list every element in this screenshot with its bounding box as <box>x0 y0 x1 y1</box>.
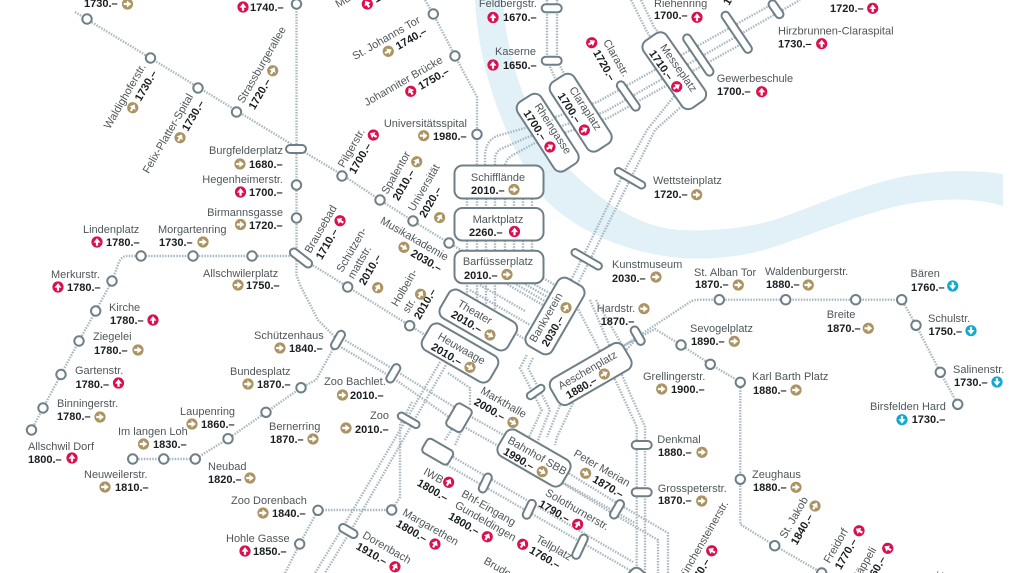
interchange: Bankverein: Bankverein <box>528 291 566 345</box>
label: Kunstmuseum: 2030.– <box>612 273 646 285</box>
label: Zeughaus: Zeughaus <box>752 469 801 481</box>
label: Waldenburgerstr.: Waldenburgerstr. <box>765 266 848 278</box>
label: Hohle Gasse <box>226 533 290 558</box>
label: Zoo Dorenbach: 1840.– <box>272 508 306 520</box>
label: Tellplatz <box>514 526 574 573</box>
label: Margarethen: Margarethen <box>400 507 460 548</box>
label: Freidorf: 1770.– <box>833 537 860 572</box>
label: Hirzbrunnen-Claraspital: 1730.– <box>778 39 812 51</box>
label: Denkmal: 1880.– <box>658 447 692 459</box>
label: Laupenring: 1860.– <box>201 419 235 431</box>
label: Sevogelplatz: 1890.– <box>691 336 725 348</box>
label: Johanniter Brücke: 1750.– <box>416 65 452 93</box>
label: Denkmal <box>657 434 708 459</box>
label: Zoo Bachlet. <box>324 376 386 402</box>
label: Breite: 1870.– <box>827 323 861 335</box>
label: Salinenstr. <box>953 364 1004 389</box>
label: Hohle Gasse: 1850.– <box>253 546 287 558</box>
interchange: Marktplatz: 2260.– <box>469 227 503 239</box>
label: St. Johanns Tor: 1740.– <box>394 25 429 53</box>
label: Grosspeterstr. <box>658 483 727 507</box>
label: Schützenhaus <box>254 330 324 355</box>
label: Hirzbrunnen-Claraspital: Hirzbrunnen-Claraspital <box>778 26 894 38</box>
label: Hegenheimerstr.: Hegenheimerstr. <box>202 174 283 186</box>
label: Schützenmattstr. <box>334 225 405 295</box>
label: Birsfelden Hard <box>870 401 946 426</box>
label: Zoo Dorenbach <box>231 495 307 520</box>
label: Kirche: 1780.– <box>110 315 144 327</box>
label: Holbeinstr.: str. <box>401 297 418 315</box>
label: Universität <box>406 162 466 227</box>
label: Brausebad: 1710.– <box>314 227 341 262</box>
label: IWB <box>415 464 457 504</box>
label: Schulstr.: 1750.– <box>928 326 962 338</box>
label: Karl Barth Platz <box>752 371 828 397</box>
interchange: Claraplatz: 1700.– <box>555 91 583 126</box>
label: Wettsteinplatz: Wettsteinplatz <box>653 175 722 187</box>
label: Bhf-Eingang Gundeldingen <box>446 488 524 555</box>
label: Grellingerstr.: Grellingerstr. <box>643 371 705 383</box>
label: Dorenbach: 1910.– <box>354 541 389 568</box>
label: Birmannsgasse: Birmannsgasse <box>207 207 283 219</box>
label: Zoo Bachlet.: Zoo Bachlet. <box>324 376 386 388</box>
label: Allschwil Dorf <box>28 441 95 466</box>
label: Zoo <box>340 410 389 436</box>
label: Sevogelplatz: Sevogelplatz <box>690 323 753 335</box>
label: Markthalle: 2000.– <box>472 396 507 423</box>
label: Merkurstr.: Merkurstr. <box>51 269 100 281</box>
label: Binningerstr.: Binningerstr. <box>57 398 118 410</box>
label: Käppeli <box>850 534 897 573</box>
label: Dorenbach: Dorenbach <box>360 529 413 567</box>
label: Zoo Bachlet.: 2010.– <box>350 390 384 402</box>
interchange: Marktplatz: Marktplatz <box>473 214 523 226</box>
interchange: Heuwaage: 2010.– <box>429 341 464 368</box>
label: Riehenring <box>654 0 707 23</box>
label: Felix-Platter-Spital: Felix-Platter-Spital <box>141 92 196 176</box>
label: Universität: Universität <box>406 162 443 214</box>
label: Brausebad <box>303 203 351 262</box>
label: Gewerbeschule: 1700.– <box>717 86 751 98</box>
label: Morgartenring <box>158 224 226 249</box>
label: Clarastr.: Clarastr. <box>600 38 631 79</box>
interchange: Marktplatz <box>454 208 544 240</box>
label: Peter Merian: Peter Merian <box>571 448 632 490</box>
label: Allschwil Dorf: 1800.– <box>28 454 62 466</box>
label: Lindenplatz <box>83 224 140 249</box>
label: Gewerbeschule <box>717 73 793 98</box>
label: Bhf-Eingang Gundeldingen: Gundeldingen <box>453 499 518 544</box>
label: Kunstmuseum: Kunstmuseum <box>612 259 682 271</box>
label: Brausebad: Brausebad <box>303 203 340 255</box>
label: Spalentor: Spalentor <box>379 149 414 196</box>
label: Laupenring: Laupenring <box>180 406 235 418</box>
label: Hardstr. <box>597 303 650 328</box>
interchange: Bahnhof SBB: 1990.– <box>501 446 536 473</box>
label: Kunstmuseum <box>612 259 682 285</box>
interchange: Barfüsserplatz: Barfüsserplatz <box>463 256 533 268</box>
label: Gewerbeschule: Gewerbeschule <box>717 73 793 85</box>
label: Holbeinstr.: 2010.– <box>412 287 439 322</box>
label: Bhf-Eingang Gundeldingen: Bhf-Eingang <box>459 488 518 529</box>
label: Schützenmattstr.: Schützen- <box>335 225 370 274</box>
label: Universitätsspital <box>384 118 467 143</box>
label: Lindenplatz: Lindenplatz <box>83 224 139 236</box>
label: Neuweilerstr. <box>84 469 149 494</box>
label: Zoo Dorenbach: Zoo Dorenbach <box>231 495 307 507</box>
label: Kirche: Kirche <box>109 302 140 314</box>
label: Bären <box>910 268 958 294</box>
label: Kaserne: 1650.– <box>503 60 537 72</box>
label: Neuweilerstr.: 1810.– <box>115 482 149 494</box>
label: Bundesplatz <box>230 366 291 391</box>
interchange: Claraplatz <box>547 71 615 155</box>
label: Bernerring: Bernerring <box>269 421 320 433</box>
label: Clarastr. <box>583 28 631 86</box>
interchange: Barfüsserplatz: 2010.– <box>464 270 498 282</box>
label: Lindenplatz: 1780.– <box>106 237 140 249</box>
label: Solothurnerstr.: 1790.– <box>536 498 572 525</box>
label: Wettsteinplatz: 1720.– <box>654 189 688 201</box>
stop pills <box>286 0 785 560</box>
interchange: Messeplatz: Messeplatz <box>657 42 699 95</box>
label: top left price <box>84 0 133 10</box>
label: Zeughaus: 1880.– <box>753 482 787 494</box>
label: IWB: IWB <box>421 466 445 487</box>
interchange: Bahnhof SBB: Bahnhof SBB <box>505 435 569 478</box>
interchange: Bankverein <box>523 275 587 357</box>
label: Hegenheimerstr. <box>202 174 283 199</box>
label: Johanniter Brücke: Johanniter Brücke <box>362 54 445 109</box>
label: Bären: 1760.– <box>911 282 945 294</box>
label: Schützenhaus: 1840.– <box>289 343 323 355</box>
interchange: Aeschenplatz: 1880.– <box>564 375 599 402</box>
label: Salinenstr.: Salinenstr. <box>953 364 1004 376</box>
stop marker: bottom box <box>617 565 657 573</box>
label: Schützenhaus: Schützenhaus <box>254 330 324 342</box>
label: Ziegelei: 1780.– <box>94 345 128 357</box>
stop marker: IWB box <box>421 437 455 466</box>
interchange: Theater <box>437 287 520 353</box>
label: Breite: Breite <box>827 309 855 321</box>
label: St. Johanns Tor: St. Johanns Tor <box>350 14 423 63</box>
label: Neubad <box>208 461 256 486</box>
label: Wettsteinplatz <box>653 175 722 201</box>
label: Allschwilerplatz: Allschwilerplatz <box>203 268 278 280</box>
label: Bundesplatz: Bundesplatz <box>230 366 291 378</box>
interchange: Barfüsserplatz <box>454 251 544 283</box>
label: Birmannsgasse <box>207 207 283 232</box>
label: Freidorf: Freidorf <box>822 526 852 565</box>
label: Karl Barth Platz: Karl Barth Platz <box>752 371 828 383</box>
label: Hardstr.: Hardstr. <box>597 303 635 315</box>
label: Kaserne: Kaserne <box>495 46 536 58</box>
label: Im langen Loh: Im langen Loh <box>118 426 188 438</box>
interchange: Aeschenplatz: Aeschenplatz <box>556 349 619 393</box>
label: Waldenburgerstr.: 1880.– <box>766 279 800 291</box>
label: Burgfelderplatz <box>209 145 283 171</box>
label: Tellplatz: Tellplatz <box>534 533 574 563</box>
label: Solothurnerstr.: Solothurnerstr. <box>543 487 611 533</box>
interchange: Theater: Theater <box>455 298 494 327</box>
label: Binningerstr. <box>57 398 118 423</box>
label: Schulstr. <box>928 313 977 338</box>
label: Zoo: 2010.– <box>355 424 389 436</box>
label: Pilgerstr.: Pilgerstr. <box>336 127 368 170</box>
label: Schützenmattstr.: 2010.– <box>357 252 384 288</box>
label: Waldighoferstr.: 1730.– <box>133 68 160 104</box>
label: Hirzbrunnen-Claraspital <box>778 26 894 51</box>
label: Denkmal: Denkmal <box>657 434 701 446</box>
label: Grellingerstr.: 1900.– <box>671 384 705 396</box>
label: Karl Barth Platz: 1880.– <box>753 385 787 397</box>
label: Waldighoferstr.: Waldighoferstr. <box>102 62 149 131</box>
interchange: Heuwaage: Heuwaage <box>435 331 487 367</box>
label: Hegenheimerstr.: 1700.– <box>249 187 283 199</box>
label: Bären: Bären <box>910 268 940 280</box>
label: Zoo: Zoo <box>370 410 389 422</box>
label: Burgfelderplatz: Burgfelderplatz <box>209 145 283 157</box>
label: Allschwilerplatz <box>203 268 280 292</box>
label: Gartenstr. <box>75 365 124 391</box>
interchange: Rheingasse <box>514 91 582 175</box>
label: Strassburgerallee: Strassburgerallee <box>235 25 289 105</box>
label: top right price 1720 <box>830 3 878 15</box>
label: Allschwil Dorf: Allschwil Dorf <box>28 441 95 453</box>
label: Birmannsgasse: 1720.– <box>249 220 283 232</box>
label: Felix-Platter-Spital: 1730.– <box>180 98 207 134</box>
label: Ziegelei: Ziegelei <box>93 331 132 343</box>
interchange: Schifflände <box>454 166 544 198</box>
stop marker: Markthalle box <box>445 402 473 433</box>
label: St. Alban Tor: St. Alban Tor <box>694 267 757 279</box>
label: Margarethen: 1800.– <box>394 518 429 545</box>
label: Musikakademie: Musikakademie <box>378 215 450 264</box>
label: top right price 1720: 1720.– <box>830 3 864 15</box>
label: Grellingerstr. <box>643 371 705 396</box>
label: Hohle Gasse: Hohle Gasse <box>226 533 290 545</box>
label: St. Alban Tor <box>694 267 757 291</box>
label: Laupenring <box>180 406 235 431</box>
label: top price 1740: 1740.– <box>250 2 284 14</box>
label: Grosspeterstr.: 1870.– <box>658 495 692 507</box>
interchange: Claraplatz: Claraplatz <box>566 85 603 133</box>
label: Schützenmattstr.: mattstr. <box>346 244 374 281</box>
label: Im langen Loh: 1830.– <box>153 439 187 451</box>
label: Schulstr.: Schulstr. <box>928 313 970 325</box>
interchange: Theater: 2010.– <box>449 309 484 336</box>
label: Waldenburgerstr. <box>765 266 848 291</box>
label: Neuweilerstr.: Neuweilerstr. <box>84 469 148 481</box>
label: Morgartenring: Morgartenring <box>158 224 226 236</box>
label: Zeughaus <box>752 469 802 494</box>
interchange: Aeschenplatz <box>547 340 635 408</box>
label: Markthalle <box>472 385 528 432</box>
label: Gartenstr.: 1780.– <box>76 379 109 391</box>
label: St. Jakob <box>778 492 824 547</box>
label: Salinenstr.: 1730.– <box>954 377 988 389</box>
interchange: Messeplatz <box>639 29 709 112</box>
label: Breite <box>827 309 874 335</box>
label: Pilgerstr. <box>336 121 382 176</box>
label: Spalentor <box>379 148 426 203</box>
label: Binningerstr.: 1780.– <box>57 411 91 423</box>
label: Peter Merian: 1870.– <box>590 474 625 501</box>
label: Bhf-Eingang Gundeldingen: 1800.– <box>446 511 481 538</box>
label: Holbeinstr.: Holbein- <box>390 267 421 309</box>
label: top price 1740 <box>237 1 284 14</box>
label: Neubad: 1820.– <box>208 474 242 486</box>
label: St. Jakob: St. Jakob <box>778 495 811 541</box>
label: Clarastr.: 1720.– <box>590 48 617 83</box>
label: Freidorf <box>822 517 868 572</box>
label: Birsfelden Hard: 1730.– <box>912 414 945 426</box>
label: IWB: 1800.– <box>415 477 450 504</box>
label: Im langen Loh <box>118 426 188 451</box>
interchange: Bahnhof SBB <box>494 427 574 489</box>
label: St. Alban Tor: 1870.– <box>695 279 729 291</box>
label: Holbeinstr. <box>390 267 443 322</box>
interchange: Messeplatz: 1710.– <box>646 48 675 83</box>
interchange: Schifflände: 2010.– <box>471 185 505 197</box>
label: Musikakademie: 2030.– <box>409 248 444 275</box>
label: Bernerring: 1870.– <box>270 434 304 446</box>
label: Merkurstr. <box>51 269 101 294</box>
label: Morgartenring: 1730.– <box>159 237 193 249</box>
label: Universität: 2020.– <box>417 185 445 220</box>
label: Hardstr.: 1870.– <box>601 316 634 328</box>
label: Merkurstr.: 1780.– <box>67 282 101 294</box>
interchange: Heuwaage <box>419 321 501 385</box>
label: Feldbergstr. <box>479 0 537 24</box>
interchange: Schifflände: Schifflände <box>471 172 525 184</box>
label: Sevogelplatz <box>690 323 753 348</box>
label: Universitätsspital: 1980.– <box>433 131 467 143</box>
label: Spalentor: 2010.– <box>391 168 418 203</box>
label: Bernerring <box>269 421 320 446</box>
interchange: Bankverein: 2030.– <box>540 314 567 349</box>
river <box>475 0 1003 259</box>
interchange: Rheingasse: 1700.– <box>520 108 549 143</box>
label: Grosspeterstr.: Grosspeterstr. <box>658 483 727 495</box>
interchange: Rheingasse: Rheingasse <box>532 101 573 157</box>
label: Ziegelei <box>93 331 144 357</box>
label: Allschwilerplatz: 1750.– <box>246 280 280 292</box>
label: Markthalle: Markthalle <box>478 385 528 421</box>
label: Gartenstr.: Gartenstr. <box>75 365 123 377</box>
label: Burgfelderplatz: 1680.– <box>249 159 283 171</box>
label: Kirche <box>109 302 159 327</box>
label: Birsfelden Hard: Birsfelden Hard <box>870 401 946 413</box>
label: Strassburgerallee: 1720.– <box>247 77 274 112</box>
label: Kaserne <box>487 46 537 72</box>
label: Neubad: Neubad <box>208 461 247 473</box>
label: Riehenring: 1700.– <box>654 10 688 22</box>
label: Pilgerstr.: 1700.– <box>347 141 374 176</box>
label: Feldbergstr.: 1670.– <box>503 12 537 24</box>
label: Universitätsspital: Universitätsspital <box>384 118 467 130</box>
label: Bundesplatz: 1870.– <box>257 379 291 391</box>
label: Tellplatz: 1760.– <box>527 544 562 572</box>
label: St. Jakob: 1840.– <box>789 512 816 547</box>
